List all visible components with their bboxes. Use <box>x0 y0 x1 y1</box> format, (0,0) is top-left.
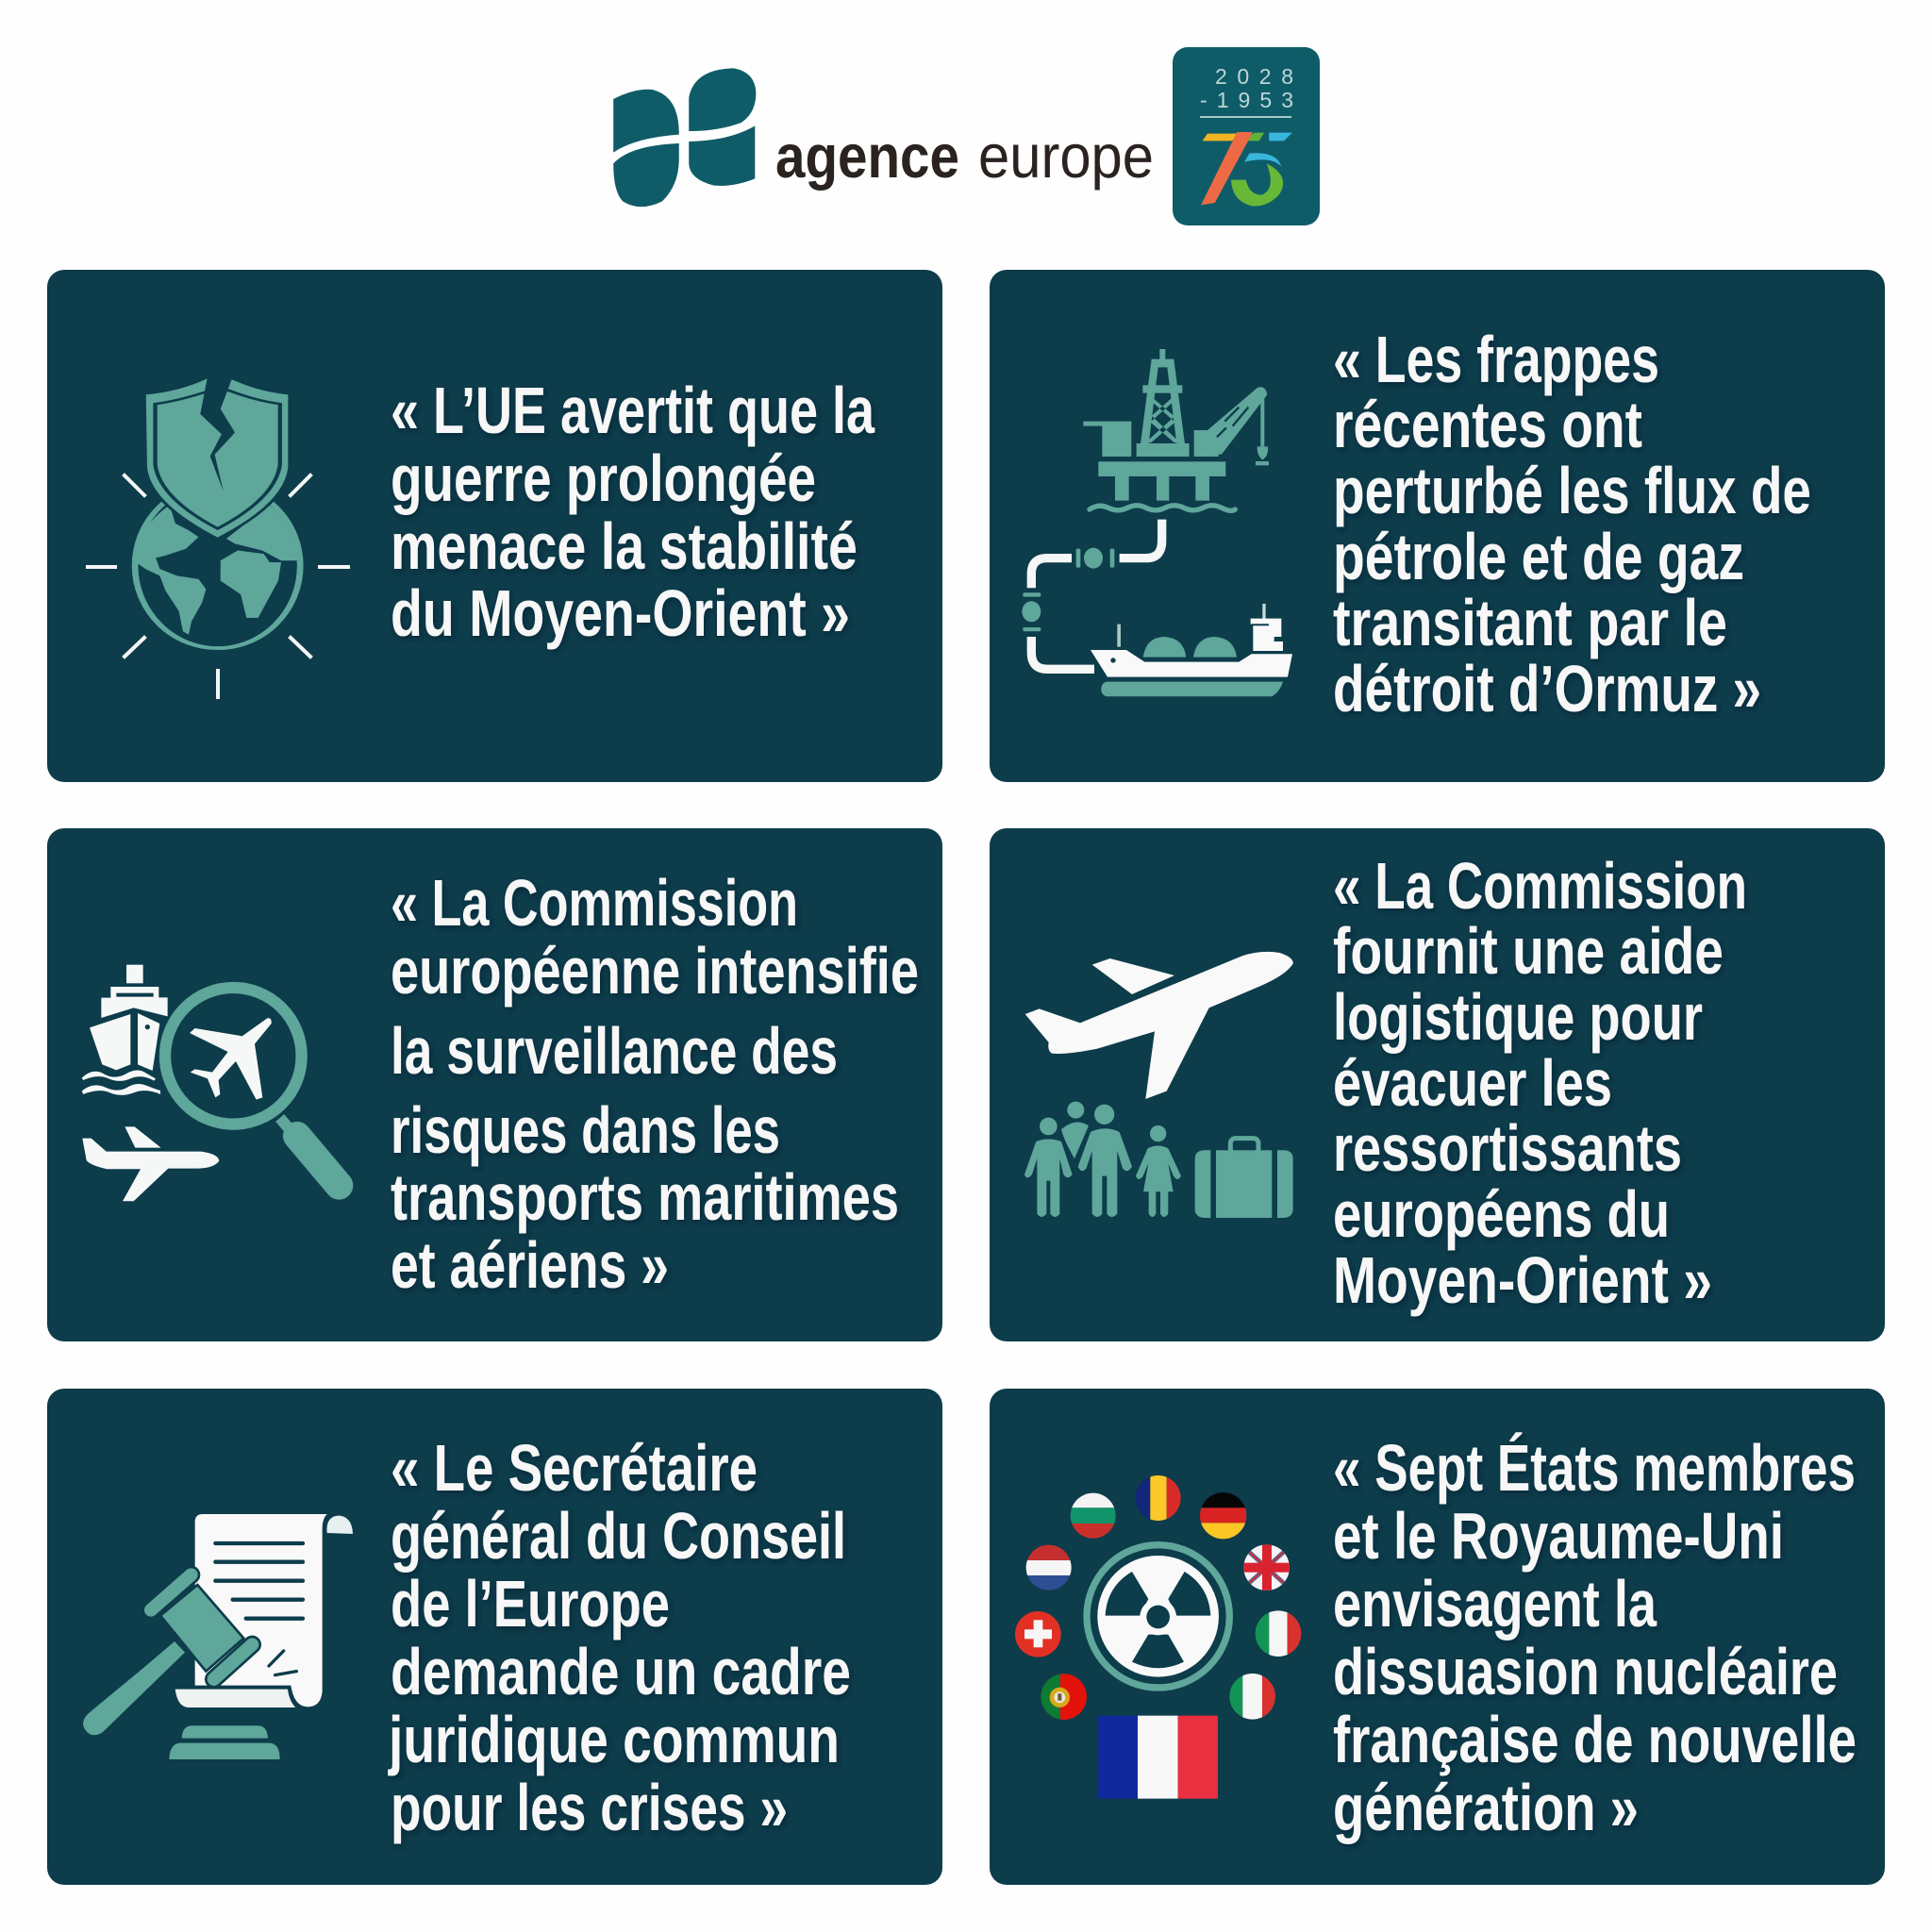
panel: evacuation <box>990 828 1885 1341</box>
wordmark: europe <box>978 122 1154 191</box>
panel background <box>990 1389 1885 1885</box>
panel: oil and gas <box>990 270 1885 782</box>
text block: menace la stabilité <box>391 509 858 583</box>
icon: radiation symbol and flags <box>1015 1474 1303 1799</box>
icon: gavel and document <box>83 1514 353 1759</box>
text block <box>1333 1431 1857 1844</box>
text block: guerre prolongée <box>391 441 816 515</box>
text block: et aériens » <box>391 1228 669 1302</box>
panel: EU warning <box>47 270 942 782</box>
text block: détroit d’Ormuz » <box>1333 652 1761 725</box>
panel background <box>47 270 942 782</box>
anniversary badge <box>1173 47 1320 225</box>
text block: de l’Europe <box>391 1567 670 1641</box>
text block: transports maritimes <box>391 1160 899 1234</box>
icon: cracked shield over globe <box>88 375 348 697</box>
text block <box>391 866 919 1302</box>
icon: ship, plane and magnifier <box>82 965 339 1201</box>
text block: Moyen-Orient » <box>1333 1243 1712 1317</box>
text block: fournit une aide <box>1333 914 1724 988</box>
text block: général du Conseil <box>391 1499 846 1573</box>
text block: « Le Secrétaire <box>391 1431 758 1505</box>
text block: juridique commun <box>387 1703 840 1776</box>
wordmark <box>775 122 1154 191</box>
panel: legal framework <box>47 1389 942 1885</box>
panel: transport surveillance <box>47 828 942 1341</box>
text block: européens du <box>1333 1177 1670 1251</box>
text block <box>391 374 875 650</box>
text block: évacuer les <box>1333 1046 1612 1120</box>
header: logos <box>613 47 1320 225</box>
text block: « L’UE avertit que la <box>391 374 875 447</box>
text block: européenne intensifie <box>391 934 919 1008</box>
icon: plane, family and suitcase <box>1024 952 1293 1218</box>
text block: logistique pour <box>1333 980 1703 1054</box>
panel background <box>47 828 942 1341</box>
anniversary badge: -1953 <box>1200 88 1293 112</box>
text block: risques dans les <box>391 1093 780 1167</box>
text block: pour les crises » <box>391 1771 788 1844</box>
panel background <box>990 270 1885 782</box>
text block: envisagent la <box>1333 1567 1657 1641</box>
text block: ressortissants <box>1333 1111 1682 1185</box>
wordmark: agence <box>775 122 959 191</box>
text block: « La Commission <box>391 866 798 940</box>
text block: demande un cadre <box>391 1635 851 1708</box>
text block: pétrole et de gaz <box>1333 520 1744 593</box>
text block: du Moyen-Orient » <box>391 576 850 650</box>
text block <box>387 1431 851 1844</box>
text block: perturbé les flux de <box>1333 454 1811 527</box>
anniversary badge: 2028 <box>1215 64 1293 89</box>
panel background <box>990 828 1885 1341</box>
icon: oil rig, pipeline and tanker <box>1022 349 1292 696</box>
text block: récentes ont <box>1333 388 1642 461</box>
text block: « Les frappes <box>1333 323 1659 396</box>
text block: transitant par le <box>1333 586 1727 659</box>
text block <box>1333 323 1811 725</box>
panel: nuclear deterrence <box>990 1389 1885 1885</box>
text block <box>1333 849 1747 1317</box>
text block: « La Commission <box>1333 849 1747 923</box>
text block: la surveillance des <box>391 1014 838 1088</box>
panel background <box>47 1389 942 1885</box>
logo mark <box>613 68 756 207</box>
text block: et le Royaume-Uni <box>1333 1499 1784 1573</box>
text block: génération » <box>1333 1771 1639 1844</box>
